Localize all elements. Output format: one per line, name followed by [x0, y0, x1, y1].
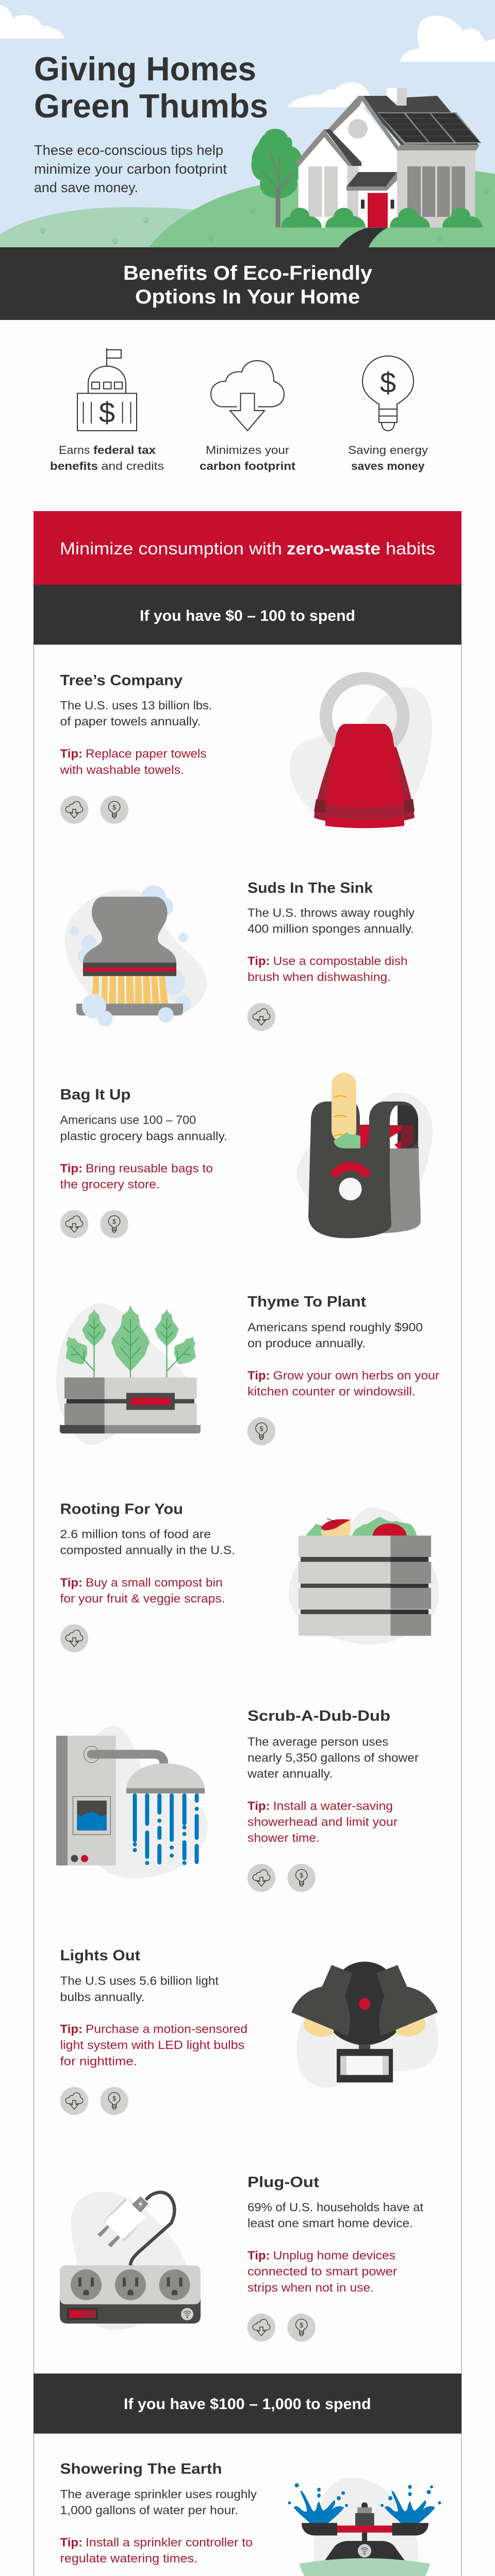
heading: Rooting For You	[60, 1501, 183, 1518]
tip: Buy a small compost bin	[86, 1576, 223, 1589]
stat: composted annually in the U.S.	[60, 1544, 235, 1557]
tip: Grow your own herbs on your	[273, 1368, 439, 1382]
benefit: carbon footprint	[200, 361, 296, 472]
benefit badges	[60, 795, 128, 824]
tip: light system with LED light bulbs	[60, 2038, 244, 2052]
tip: Install a sprinkler controller to	[86, 2536, 253, 2549]
tip: Bring reusable bags to	[86, 1161, 213, 1175]
benefit badges	[248, 1417, 275, 1445]
illustration: herb planter	[56, 1303, 204, 1445]
benefit badges	[60, 2087, 128, 2115]
benefit badges	[248, 1003, 275, 1031]
tip: for nighttime.	[60, 2054, 137, 2067]
band: $0–100: If you have $0 – 100 to spend	[140, 607, 355, 624]
tip: regulate watering times.	[60, 2551, 197, 2565]
band: $100–1,000	[34, 2374, 461, 2434]
tip: showerhead and limit your	[248, 1815, 398, 1828]
stat: 2.6 million tons of food are	[60, 1528, 211, 1541]
red banner	[34, 511, 461, 585]
stat: 69% of U.S. households have at	[248, 2200, 424, 2214]
caption: carbon footprint	[200, 460, 296, 472]
heading: Showering The Earth	[60, 2461, 222, 2478]
intro text: These eco-conscious tips help	[34, 142, 223, 158]
icon: dollar light bulb	[362, 356, 414, 431]
tip: Tip:	[60, 2536, 82, 2549]
stat: plastic grocery bags annually.	[60, 1129, 227, 1143]
caption: federal tax	[93, 444, 156, 456]
caption: saves money	[351, 460, 425, 472]
illustration: compost bin	[289, 1507, 439, 1645]
benefit: saves money	[348, 356, 428, 472]
benefit badges	[60, 1624, 88, 1652]
stat: 400 million sponges annually.	[248, 922, 414, 936]
stat: of paper towels annually.	[60, 715, 201, 728]
stat: least one smart home device.	[248, 2216, 413, 2230]
icon: cloud with down arrow	[211, 361, 284, 431]
tip: Replace paper towels	[86, 747, 206, 760]
band: $0–100	[34, 585, 461, 645]
tip: Tip:	[60, 747, 82, 760]
item: Plug-Out	[60, 2174, 424, 2342]
tip: for your fruit & veggie scraps.	[60, 1592, 225, 1605]
item: Scrub-A-Dub-Dub	[56, 1708, 419, 1892]
stat: The U.S uses 5.6 billion light	[60, 1974, 219, 1988]
tip: connected to smart power	[248, 2265, 397, 2278]
stat: bulbs annually.	[60, 1990, 144, 2004]
illustration: motion-sensor light	[291, 1962, 438, 2088]
stat: Americans use 100 – 700	[60, 1113, 196, 1127]
benefit: federal tax	[50, 348, 164, 472]
tip: Purchase a motion-sensored	[86, 2022, 248, 2036]
red banner: Minimize consumption with	[60, 539, 282, 558]
tip: the grocery store.	[60, 1177, 160, 1191]
heading: Tree’s Company	[60, 672, 183, 689]
stat: on produce annually.	[248, 1336, 366, 1350]
tip: Unplug home devices	[273, 2249, 395, 2262]
stat: The U.S. throws away roughly	[248, 906, 415, 919]
tip: Tip:	[248, 954, 270, 968]
item: Thyme To Plant	[56, 1294, 439, 1445]
title: Giving Homes	[34, 50, 256, 88]
tip: brush when dishwashing.	[248, 970, 391, 984]
red banner: zero-waste	[287, 539, 381, 558]
stat: Americans spend roughly $900	[248, 1320, 423, 1334]
hero illustration: sky, hills and eco home	[0, 0, 495, 247]
heading: Scrub-A-Dub-Dub	[248, 1708, 390, 1724]
illustration: reusable grocery bag	[296, 1073, 433, 1238]
caption: Minimizes your	[206, 444, 289, 456]
illustration: smart sprinkler	[288, 2478, 441, 2576]
stat: 1,000 gallons of water per hour.	[60, 2503, 238, 2517]
tip: Tip:	[60, 1161, 82, 1175]
illustration: towel on ring	[290, 678, 432, 828]
intro text: and save money.	[34, 180, 138, 195]
illustration: smart power strip	[60, 2192, 201, 2330]
benefit badges	[248, 1864, 316, 1892]
item: Lights Out	[60, 1947, 438, 2115]
tip: Install a water-saving	[273, 1799, 393, 1812]
item: Suds In The Sink	[64, 880, 415, 1031]
heading: Thyme To Plant	[248, 1294, 366, 1310]
heading: Suds In The Sink	[248, 880, 373, 896]
benefit badges	[248, 2313, 316, 2342]
benefits heading band: Options In Your Home	[135, 286, 360, 308]
tip: Tip:	[60, 1576, 82, 1589]
tip: Tip:	[60, 2022, 82, 2036]
tip: Tip:	[248, 1368, 270, 1382]
caption: benefits	[50, 460, 98, 472]
tip: with washable towels.	[59, 763, 184, 776]
heading: Bag It Up	[60, 1087, 131, 1103]
illustration: water-saving shower	[56, 1726, 208, 1878]
tip: Tip:	[248, 2249, 270, 2262]
tip: strips when not in use.	[248, 2281, 374, 2294]
caption: Earns	[59, 444, 90, 456]
tip: Tip:	[248, 1799, 270, 1812]
red banner: habits	[386, 539, 435, 558]
stat: nearly 5,350 gallons of shower	[248, 1751, 419, 1764]
stat: The U.S. uses 13 billion lbs.	[60, 699, 212, 712]
heading: Plug-Out	[248, 2174, 319, 2191]
icon: capitol with dollar	[77, 348, 137, 431]
card outline	[34, 645, 461, 2576]
tip: shower time.	[248, 1831, 320, 1844]
item: Bag It Up	[60, 1073, 433, 1238]
benefits heading band: Benefits Of Eco-Friendly	[123, 262, 372, 284]
band: $100–1,000: If you have $100 – 1,000 to spend	[124, 2396, 371, 2413]
title: Green Thumbs	[34, 87, 268, 125]
item: Tree's Company	[59, 672, 432, 828]
item: Rooting For You	[60, 1501, 439, 1652]
caption: Saving energy	[348, 444, 428, 456]
caption: and credits	[101, 460, 164, 472]
tip: kitchen counter or windowsill.	[248, 1385, 416, 1398]
illustration: dish brush	[64, 885, 207, 1026]
tip: Use a compostable dish	[273, 954, 408, 968]
stat: The average sprinkler uses roughly	[60, 2487, 257, 2501]
benefits heading band	[0, 247, 495, 320]
stat: water annually.	[247, 1767, 333, 1781]
heading: Lights Out	[60, 1947, 140, 1964]
intro text: minimize your carbon footprint	[34, 161, 227, 177]
benefit badges	[60, 1210, 128, 1238]
stat: The average person uses	[248, 1735, 388, 1749]
item: Showering The Earth	[60, 2461, 441, 2576]
